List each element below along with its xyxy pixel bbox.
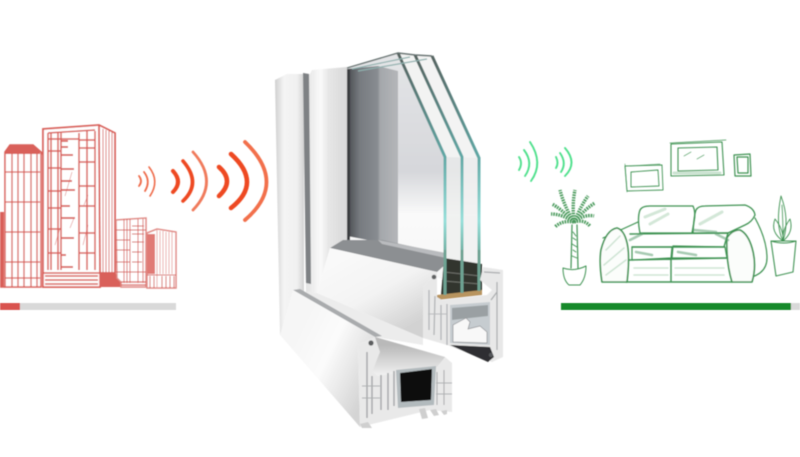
sofa shading <box>645 209 722 224</box>
lower sash: profile end section <box>358 337 452 428</box>
right arm <box>727 230 754 282</box>
inner tilted bead surface <box>372 337 445 376</box>
large wave group <box>219 142 266 220</box>
steel reinforcement chamber <box>400 369 432 402</box>
upper sash: inner bead face <box>317 248 437 338</box>
left arm <box>600 228 628 282</box>
seat and cushions <box>630 233 728 247</box>
picture frame: right <box>734 154 751 176</box>
building: small tower <box>116 218 146 287</box>
dark interior rebate <box>347 66 398 246</box>
building: left tower <box>0 145 44 287</box>
medium wave group <box>173 152 206 210</box>
glass panes <box>347 53 479 293</box>
glass rear background <box>347 53 478 290</box>
icon: red sound waves <box>139 142 266 220</box>
groove between the two sash sections <box>293 290 423 345</box>
sofa <box>600 205 767 282</box>
picture frame: centre <box>670 140 726 176</box>
upper sash: black gasket <box>450 345 494 362</box>
upper sash: profile end section <box>423 267 503 362</box>
right wave group <box>556 148 572 176</box>
progress bar: outdoor noise level <box>0 303 176 310</box>
building: rightmost tower <box>147 229 176 288</box>
sofa back cushions <box>638 206 695 233</box>
outer frame: left post <box>275 67 347 345</box>
sofa back <box>603 218 767 277</box>
building: far left sliver <box>0 212 4 287</box>
left wave group <box>519 142 537 181</box>
building: main tall tower <box>43 125 121 287</box>
illustration: sketched living room <box>551 140 796 285</box>
illustration: PVC window cross-section <box>275 53 503 428</box>
picture frame: left <box>625 164 663 192</box>
bottom rebate strip <box>330 240 446 272</box>
small wave group <box>139 167 155 196</box>
upper sash: sealed bottom of glass unit <box>437 250 482 300</box>
illustration: outdoor city skyline <box>0 125 176 288</box>
reinforcement chamber <box>450 302 490 345</box>
icon: green sound waves <box>519 142 572 181</box>
progress bar: indoor noise level <box>561 303 800 310</box>
lower sash: bead face <box>280 290 375 427</box>
potted leaf plant <box>771 196 796 276</box>
potted palm <box>551 190 595 285</box>
